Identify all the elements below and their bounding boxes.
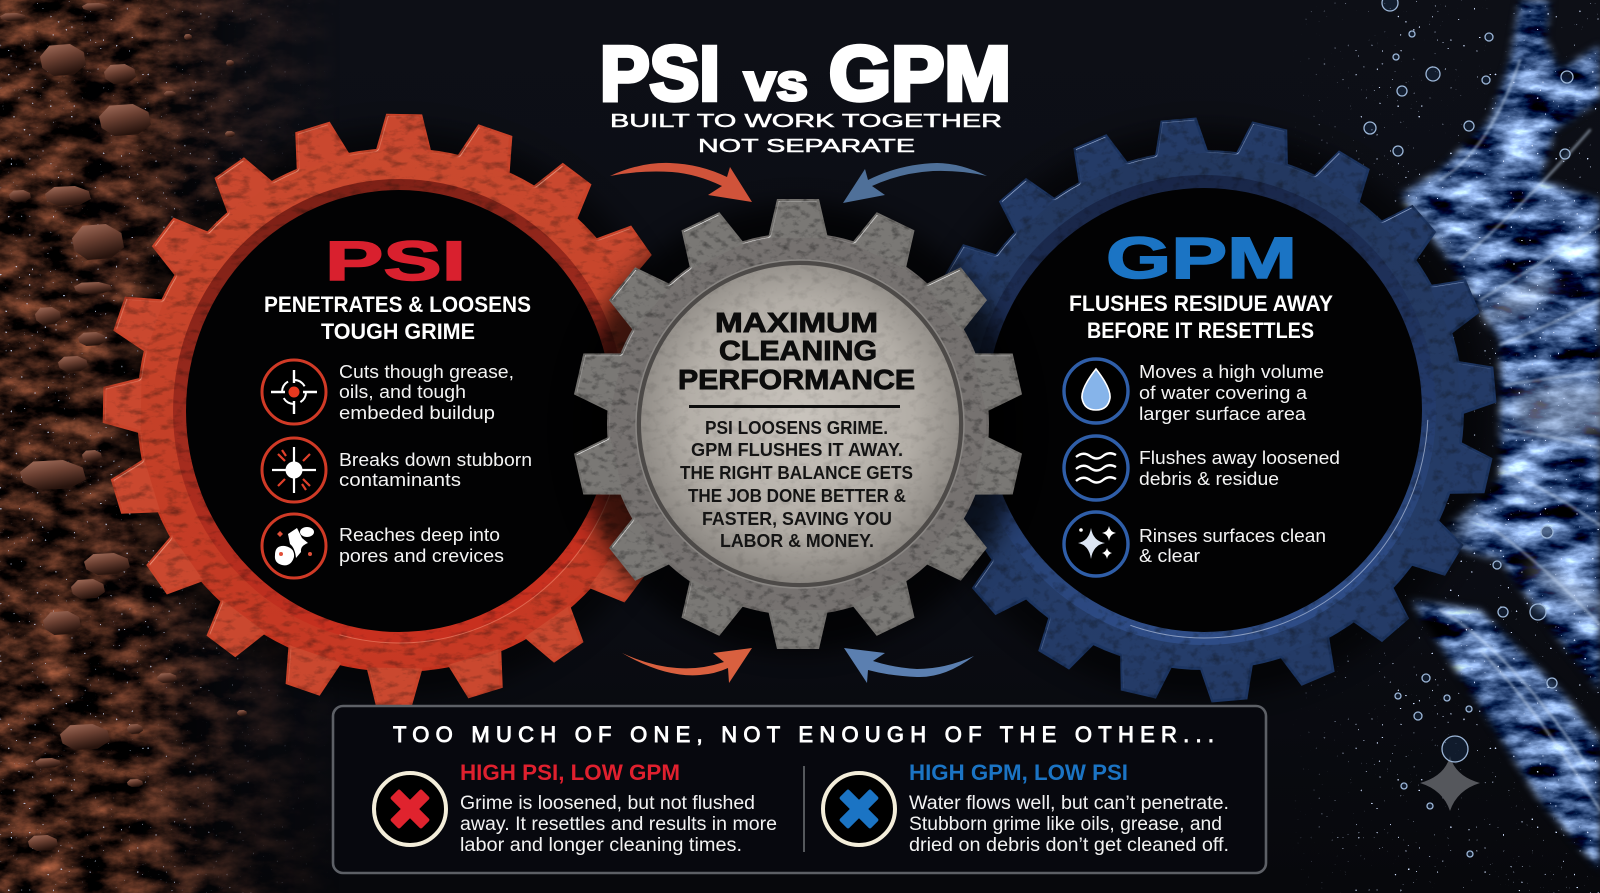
text: rinses clean bbox=[1139, 526, 1326, 566]
text: high GPM description: Stubborn grime like oils, grease, and bbox=[909, 814, 1222, 835]
panel: centre silver gear bbox=[572, 199, 1024, 653]
centre body text: LABOR & MONEY. bbox=[720, 531, 874, 551]
red gear body bbox=[103, 114, 695, 706]
panel: GPM gear bbox=[911, 117, 1497, 703]
arrow: top red bbox=[610, 163, 752, 202]
centre heading: PERFORMANCE bbox=[678, 364, 915, 395]
subtitle: NOT SEPARATE bbox=[698, 136, 915, 156]
text: reaches deep bbox=[339, 525, 504, 566]
text: high GPM description bbox=[909, 793, 1229, 856]
text: cuts through grease bbox=[339, 362, 514, 423]
text: reaches deep: pores and crevices bbox=[339, 546, 504, 566]
icon: burst bbox=[262, 438, 326, 502]
GPM subheading: BEFORE IT RESETTLES bbox=[1087, 318, 1314, 343]
centre body text: THE JOB DONE BETTER & bbox=[688, 486, 906, 506]
centre body text: FASTER, SAVING YOU bbox=[702, 509, 892, 529]
GPM inner disc bbox=[986, 188, 1422, 632]
text: breaks down contaminants bbox=[339, 450, 532, 490]
text: breaks down contaminants: contaminants bbox=[339, 470, 461, 490]
text: flushes away: Flushes away loosened bbox=[1139, 448, 1340, 468]
centre body text: GPM FLUSHES IT AWAY. bbox=[691, 440, 903, 460]
silver gear body bbox=[572, 199, 1024, 649]
background: dirt and rocks bbox=[0, 0, 340, 893]
text: rinses clean: & clear bbox=[1139, 546, 1200, 566]
centre heading: CLEANING bbox=[719, 335, 877, 366]
GPM subheading: FLUSHES RESIDUE AWAY bbox=[1069, 291, 1333, 316]
text: cuts through grease: embeded buildup bbox=[339, 403, 495, 423]
text: flushes away bbox=[1139, 448, 1340, 489]
title: PSI bbox=[600, 31, 720, 117]
PSI subheading bbox=[264, 292, 531, 344]
PSI subheading: TOUGH GRIME bbox=[321, 319, 475, 344]
text: high PSI description: away. It resettles and results in more bbox=[460, 814, 777, 835]
centre body text: THE RIGHT BALANCE GETS bbox=[680, 463, 913, 483]
arrow: top blue bbox=[843, 163, 987, 203]
icon: red X bbox=[374, 773, 446, 845]
text: breaks down contaminants: Breaks down stubborn bbox=[339, 450, 532, 470]
text: high PSI description: labor and longer cleaning times. bbox=[460, 835, 742, 856]
title bbox=[600, 31, 1011, 117]
icon: target bbox=[262, 360, 326, 424]
text: reaches deep: Reaches deep into bbox=[339, 525, 500, 545]
centre body text bbox=[680, 418, 913, 551]
icon: blue X bbox=[823, 773, 895, 845]
panel heading: TOO MUCH OF ONE, NOT ENOUGH OF THE OTHER... bbox=[393, 722, 1214, 747]
centre heading: MAXIMUM bbox=[715, 307, 878, 338]
text: flushes away: debris & residue bbox=[1139, 469, 1279, 489]
panel: PSI gear bbox=[103, 114, 695, 706]
subtitle: BUILT TO WORK TOGETHER bbox=[610, 111, 1002, 131]
text: moves high volume: larger surface area bbox=[1139, 404, 1307, 424]
centre heading bbox=[678, 307, 915, 395]
title: vs bbox=[744, 54, 808, 112]
icon: debris chunks bbox=[262, 514, 326, 578]
centre body text: PSI LOOSENS GRIME. bbox=[705, 418, 888, 438]
text: high GPM description: dried on debris don’t get cleaned off. bbox=[909, 835, 1229, 856]
heading: high PSI: HIGH PSI, LOW GPM bbox=[460, 760, 680, 785]
GPM subheading bbox=[1069, 291, 1333, 343]
background: water splash bbox=[1290, 0, 1600, 893]
text: cuts through grease: oils, and tough bbox=[339, 382, 466, 402]
text: high PSI description: Grime is loosened, but not flushed bbox=[460, 793, 755, 814]
text: moves high volume bbox=[1139, 362, 1324, 424]
panel: too much of one bbox=[333, 706, 1266, 873]
subtitle bbox=[610, 111, 1002, 156]
PSI subheading: PENETRATES & LOOSENS bbox=[264, 292, 531, 317]
text: cuts through grease: Cuts though grease, bbox=[339, 362, 514, 382]
gear face bbox=[636, 260, 964, 588]
text: moves high volume: of water covering a bbox=[1139, 383, 1308, 403]
heading: high GPM: HIGH GPM, LOW PSI bbox=[909, 760, 1128, 785]
PSI heading: PSI bbox=[325, 229, 466, 292]
text: high GPM description: Water flows well, but can’t penetrate. bbox=[909, 793, 1229, 814]
blue gear body bbox=[911, 117, 1497, 703]
text: rinses clean: Rinses surfaces clean bbox=[1139, 526, 1326, 546]
icon: waves bbox=[1064, 436, 1128, 500]
PSI inner disc bbox=[186, 190, 612, 632]
text: moves high volume: Moves a high volume bbox=[1139, 362, 1324, 382]
icon: faint star bbox=[1420, 756, 1480, 811]
arrow: bottom red bbox=[622, 648, 752, 683]
text: high PSI description bbox=[460, 793, 777, 856]
arrow: bottom blue bbox=[844, 648, 974, 683]
GPM heading: GPM bbox=[1106, 226, 1297, 291]
icon: sparkles bbox=[1064, 512, 1128, 576]
title: GPM bbox=[829, 31, 1011, 117]
icon: water drop bbox=[1064, 359, 1128, 423]
